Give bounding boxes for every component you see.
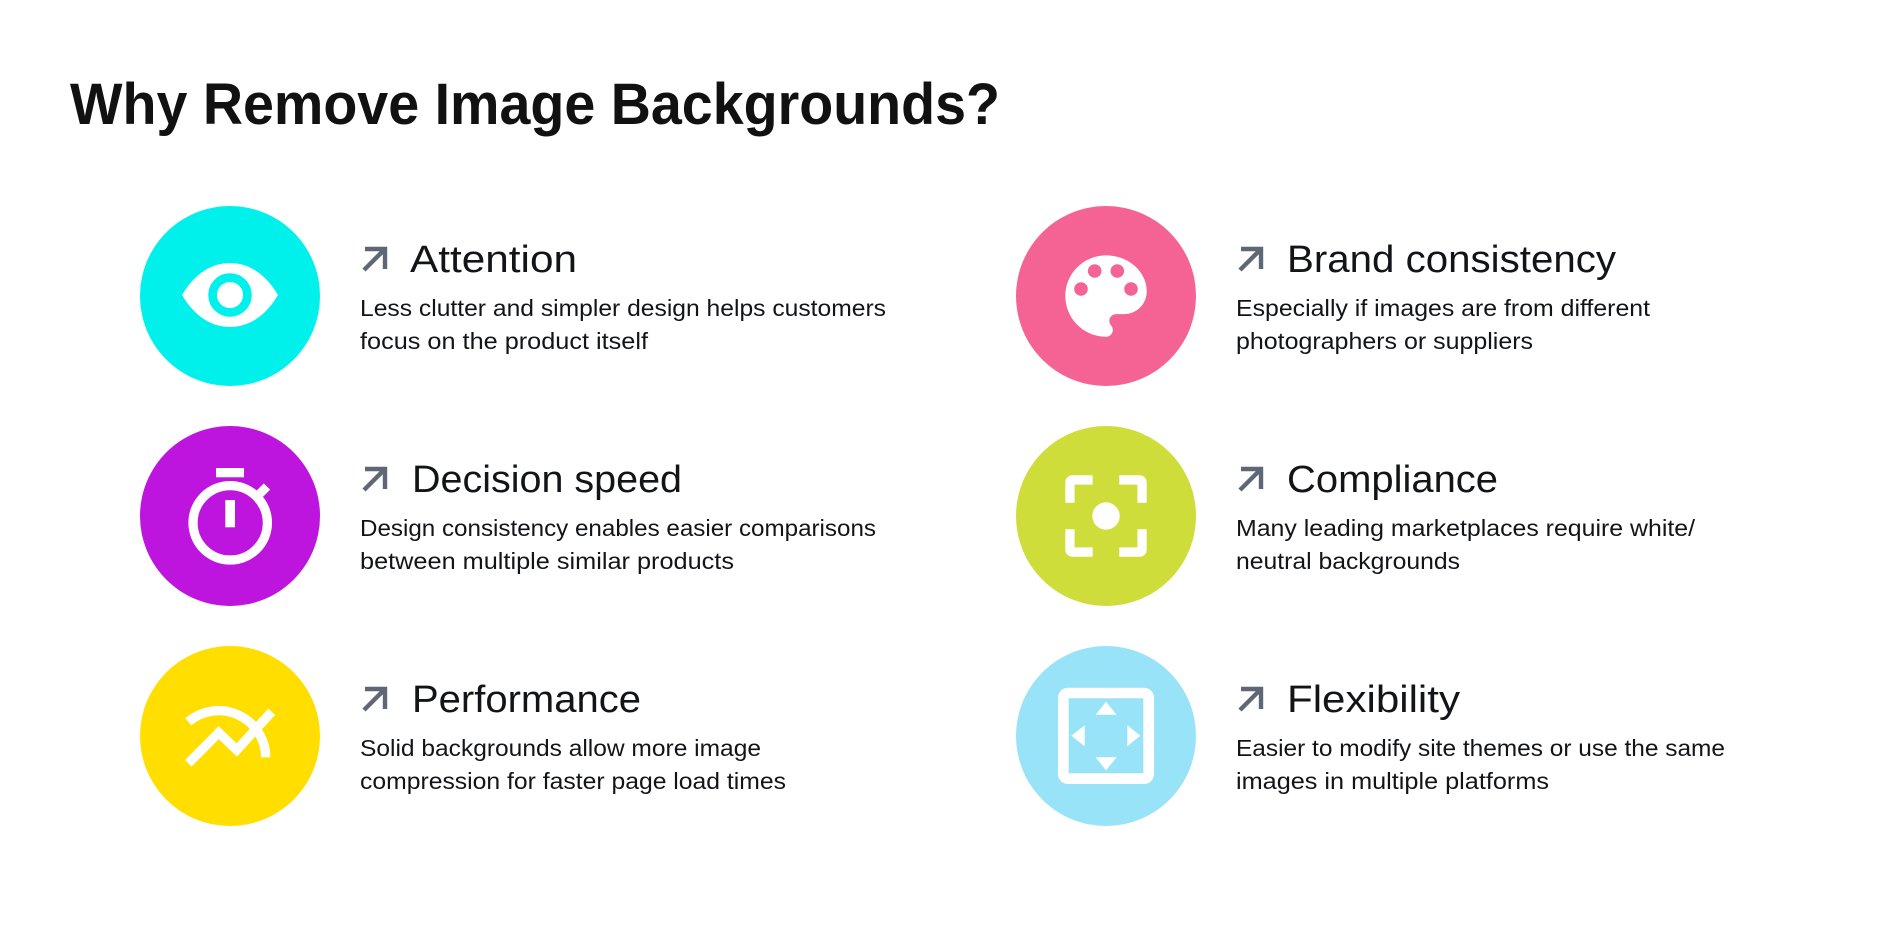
text: compliance description: Many leading marketplaces require white/ bbox=[1236, 515, 1696, 541]
heading: attention: Attention bbox=[410, 239, 577, 281]
icon: chart line bbox=[140, 646, 320, 826]
arrow: compliance bbox=[1240, 469, 1261, 490]
panel: flexibility bbox=[1016, 646, 1725, 826]
heading: compliance: Compliance bbox=[1287, 459, 1498, 501]
arrow: performance bbox=[364, 689, 385, 710]
panel: brand consistency bbox=[1016, 206, 1651, 386]
icon: focus frame bbox=[1016, 426, 1196, 606]
heading: performance: Performance bbox=[412, 679, 641, 721]
text: flexibility description bbox=[1236, 735, 1725, 794]
icon: palette bbox=[1016, 206, 1196, 386]
text: brand consistency description: photographers or suppliers bbox=[1236, 328, 1533, 354]
arrow: decision speed bbox=[364, 469, 385, 490]
text: attention description: Less clutter and simpler design helps customers bbox=[360, 295, 886, 321]
arrow: attention bbox=[364, 249, 385, 270]
text: decision speed description: Design consistency enables easier comparisons bbox=[360, 515, 876, 541]
text: decision speed description: between multiple similar products bbox=[360, 548, 734, 574]
text: performance description: compression for faster page load times bbox=[360, 768, 786, 794]
arrow: brand consistency bbox=[1240, 249, 1261, 270]
icon: eye bbox=[140, 206, 320, 386]
text: performance description bbox=[360, 735, 786, 794]
text: compliance description: neutral backgrounds bbox=[1236, 548, 1460, 574]
heading: brand consistency: Brand consistency bbox=[1287, 239, 1616, 281]
text: attention description bbox=[360, 295, 886, 354]
arrow: flexibility bbox=[1240, 689, 1261, 710]
icon: stopwatch bbox=[140, 426, 320, 606]
text: decision speed description bbox=[360, 515, 876, 574]
heading: decision speed: Decision speed bbox=[412, 459, 682, 501]
text: performance description: Solid backgrounds allow more image bbox=[360, 735, 761, 761]
panel: performance bbox=[140, 646, 786, 826]
icon: resize frame bbox=[1016, 646, 1196, 826]
panel: decision speed bbox=[140, 426, 876, 606]
heading: flexibility: Flexibility bbox=[1287, 679, 1460, 721]
text: flexibility description: Easier to modify site themes or use the same bbox=[1236, 735, 1725, 761]
text: flexibility description: images in multiple platforms bbox=[1236, 768, 1549, 794]
title: Why Remove Image Backgrounds? bbox=[70, 72, 1000, 137]
panel: attention bbox=[140, 206, 886, 386]
text: brand consistency description: Especially if images are from different bbox=[1236, 295, 1651, 321]
text: attention description: focus on the product itself bbox=[360, 328, 649, 354]
text: compliance description bbox=[1236, 515, 1696, 574]
panel: compliance bbox=[1016, 426, 1696, 606]
text: brand consistency description bbox=[1236, 295, 1651, 354]
